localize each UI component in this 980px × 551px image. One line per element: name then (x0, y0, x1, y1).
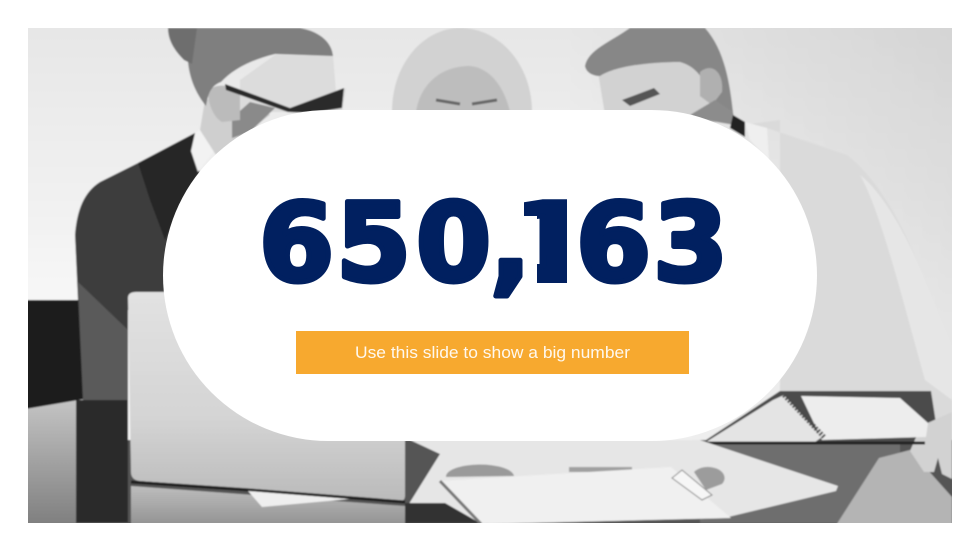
laptop (126, 290, 406, 523)
sweater (743, 120, 952, 420)
papers on table (405, 440, 838, 524)
hair (392, 28, 532, 112)
glasses (225, 84, 344, 113)
sweater reflection (836, 449, 952, 523)
base (405, 447, 441, 500)
eyebrow (622, 88, 660, 106)
caption text: Use this slide to show a big number (355, 344, 631, 362)
white pill panel (163, 110, 817, 441)
big number: 6 (259, 182, 334, 306)
lid (128, 292, 405, 501)
collar (730, 115, 745, 137)
right page (801, 396, 928, 440)
hair bun (168, 28, 197, 64)
big number: 0 (416, 182, 491, 306)
table (28, 398, 129, 523)
big number: 5 (336, 182, 411, 306)
bars (569, 467, 632, 472)
big number: 6 (576, 182, 651, 306)
chair (28, 299, 84, 410)
orange caption bar (296, 331, 689, 374)
pie chart left (446, 465, 514, 477)
big number (259, 180, 728, 306)
big number: 1 (503, 180, 601, 306)
face (240, 55, 346, 112)
big number: 3 (653, 182, 728, 306)
face (416, 66, 510, 112)
face (598, 62, 714, 122)
suit (74, 134, 200, 336)
neck shading (690, 100, 735, 125)
ear (700, 68, 722, 105)
left page (706, 395, 822, 442)
shadow line (131, 482, 405, 502)
person middle (392, 28, 532, 112)
reflection (130, 485, 406, 523)
paper under laptop (248, 491, 350, 507)
paper clip (672, 470, 712, 500)
hair (188, 28, 333, 106)
person right (585, 28, 952, 420)
main paper (440, 467, 731, 524)
back paper (407, 440, 838, 524)
ear (208, 86, 240, 122)
hand (910, 412, 952, 479)
beard (232, 102, 275, 138)
notebook (706, 395, 928, 443)
big number: , (490, 182, 531, 306)
collar (190, 133, 200, 173)
person left (75, 28, 346, 523)
hair (585, 28, 733, 112)
binding (784, 395, 824, 437)
pie chart right (694, 467, 725, 490)
neck (200, 99, 270, 154)
table right strip (700, 391, 938, 444)
